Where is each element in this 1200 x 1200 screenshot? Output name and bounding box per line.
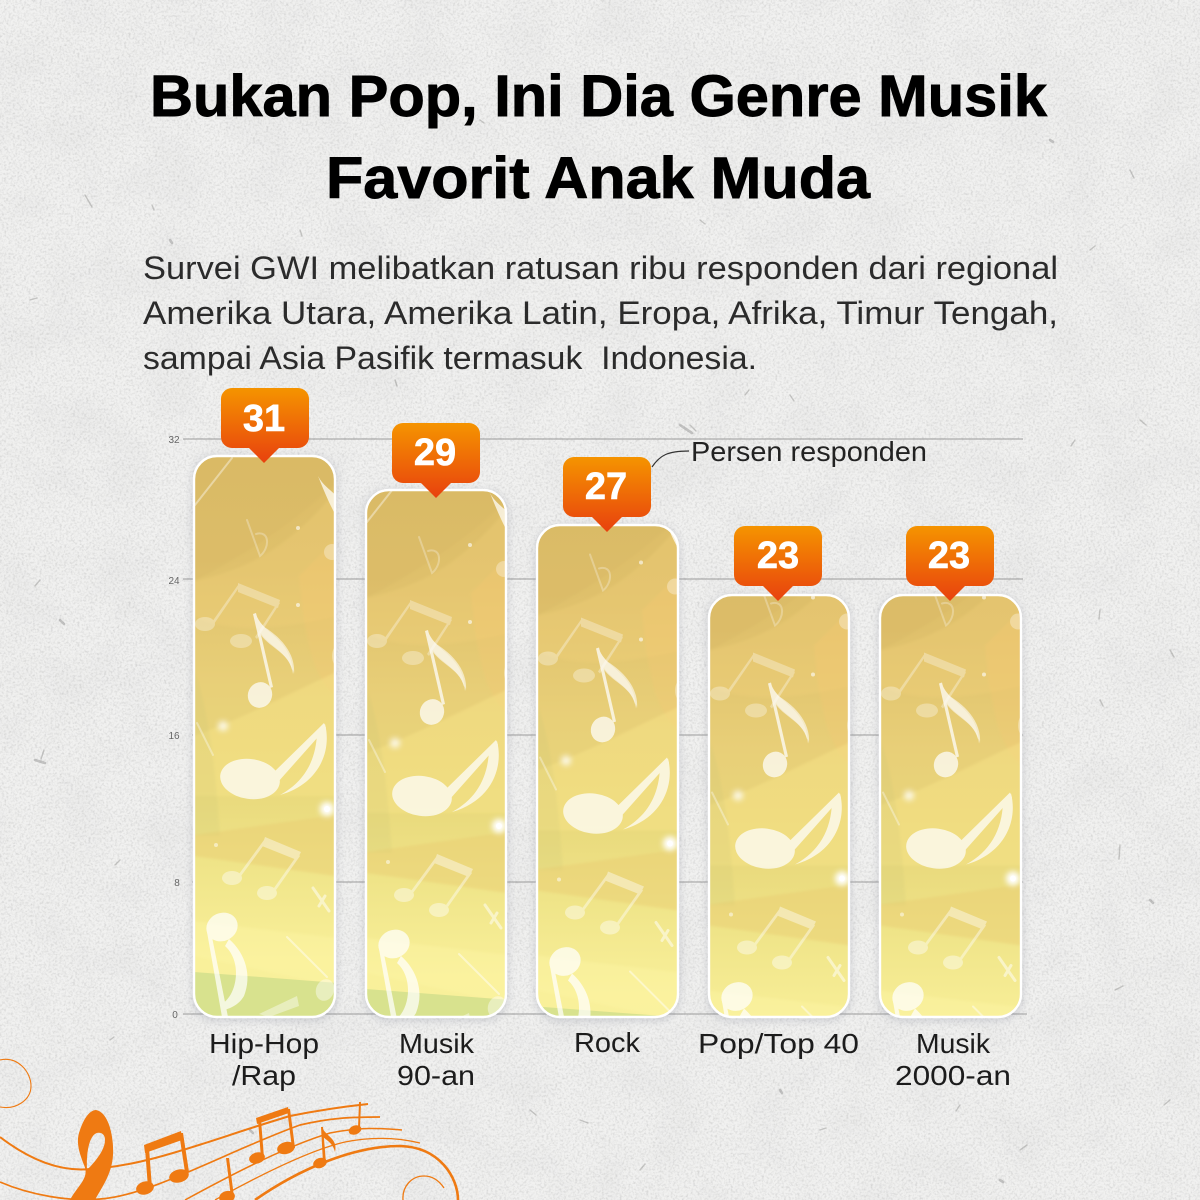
decoration: orange music staff and notes <box>0 1059 458 1200</box>
value badge 29: 29 <box>414 432 456 474</box>
bar: Pop/Top 40 23 <box>704 592 854 1024</box>
category labels: Rock <box>574 1027 641 1058</box>
intro paragraph: Amerika Utara, Amerika Latin, Eropa, Afrika, Timur Tengah, <box>143 295 1058 331</box>
category labels: Musik <box>916 1028 991 1059</box>
value badge 23 second: 23 <box>928 535 970 577</box>
category labels: Hip-Hop <box>209 1028 319 1059</box>
value badge 31 <box>221 388 309 463</box>
title <box>150 64 1048 211</box>
category labels: 2000-an <box>895 1060 1011 1091</box>
intro paragraph: Survei GWI melibatkan ratusan ribu responden dari regional <box>143 250 1058 286</box>
chart axis and gridlines: 8 <box>174 878 180 889</box>
intro paragraph <box>143 250 1058 376</box>
chart axis and gridlines: 24 <box>168 576 180 587</box>
value badge 27 <box>563 457 651 532</box>
chart axis and gridlines: 16 <box>168 731 180 742</box>
intro paragraph: sampai Asia Pasifik termasuk Indonesia. <box>143 340 757 376</box>
category labels <box>209 1027 1011 1091</box>
value badge 23 <box>734 526 822 601</box>
value badge 23: 23 <box>757 535 799 577</box>
value badge 29 <box>392 423 480 498</box>
category labels: /Rap <box>232 1060 296 1091</box>
category labels: 90-an <box>397 1060 475 1091</box>
bar: Musik 90-an 29 <box>362 488 510 1024</box>
chart axis and gridlines <box>168 435 1027 1021</box>
category labels: Musik <box>399 1028 475 1059</box>
category labels: Pop/Top 40 <box>698 1028 859 1059</box>
title: Bukan Pop, Ini Dia Genre Musik <box>150 64 1048 129</box>
bar: Hip-Hop/Rap 31 <box>190 454 340 1024</box>
title: Favorit Anak Muda <box>326 146 871 211</box>
annotation: Persen responden: Persen responden <box>691 436 927 467</box>
bar: Rock 27 <box>532 522 682 1024</box>
chart axis and gridlines: 32 <box>168 435 180 446</box>
chart axis and gridlines: 0 <box>172 1010 178 1021</box>
bar: Musik 2000-an 23 <box>876 592 1026 1024</box>
icon: treble clef <box>70 1110 113 1200</box>
value badge 27: 27 <box>585 466 627 508</box>
value badge 31: 31 <box>243 398 285 440</box>
value badge 23 second <box>906 526 994 601</box>
